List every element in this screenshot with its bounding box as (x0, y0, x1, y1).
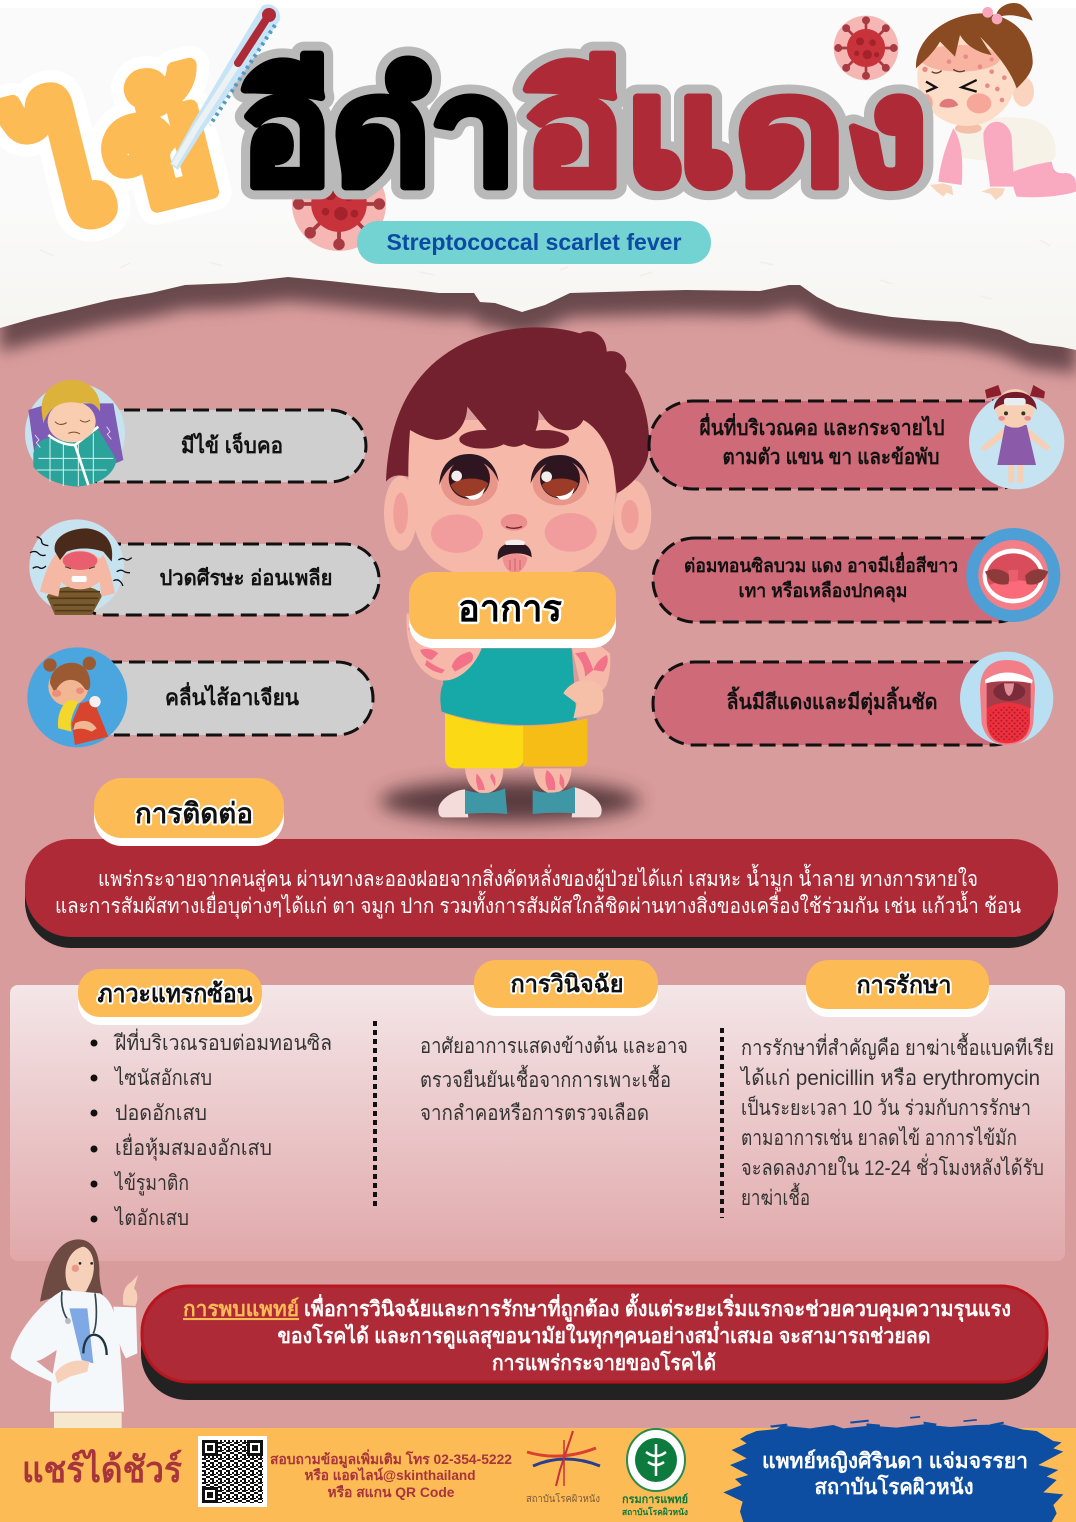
footer: contact text: หรือ สแกน QR Code (328, 1484, 455, 1500)
symptom pill: fever and sore throat (65, 410, 366, 482)
logo: institute of dermatology (526, 1431, 600, 1505)
symptom pill: swollen tonsils (653, 538, 1038, 622)
icon: boy with headache (29, 519, 132, 615)
icon: red tongue (960, 652, 1053, 745)
virus decoration, upper right (834, 16, 898, 80)
heading badge: complications (78, 969, 262, 1025)
footer: contact text: สอบถามข้อมูลเพิ่มเติม โทร 02-354-5222 (270, 1449, 512, 1468)
title: fever word: ไข้ (0, 54, 230, 267)
footer: contact text: หรือ แอดไลน์@skinthailand (304, 1466, 476, 1483)
footer: author brush banner: สถาบันโรคผิวหนัง (814, 1474, 974, 1499)
list: complications (90, 1028, 332, 1230)
logo: department of medical services: สถาบันโรคผิวหนัง (622, 1506, 688, 1517)
logo: institute of dermatology: สถาบันโรคผิวหนัง (526, 1492, 600, 1505)
virus decoration, under title (292, 157, 386, 251)
panel: complications, diagnosis, treatment (10, 985, 1065, 1261)
symptom pill: headache and fatigue (70, 544, 379, 615)
heading badge: treatment (806, 960, 989, 1017)
list: complications: ฝีที่บริเวณรอบต่อมทอนซิล (113, 1028, 332, 1055)
text: diagnosis: จากลำคอหรือการตรวจเลือด (420, 1102, 649, 1125)
footer: share slogan: แชร์ได้ชัวร์ (22, 1448, 183, 1490)
text: treatment: ได้แก่ penicillin หรือ erythromycin (739, 1066, 1040, 1090)
illustration: doctor (11, 1239, 138, 1430)
text: treatment (739, 1033, 1054, 1210)
text: treatment: เป็นระยะเวลา 10 วัน ร่วมกับการรักษา (741, 1094, 1031, 1120)
footer band (0, 1428, 1076, 1522)
title: black and red words (240, 48, 928, 216)
icon: girl vomiting (27, 647, 127, 747)
list: complications: เยื่อหุ้มสมองอักเสบ (115, 1133, 272, 1161)
illustration: sick boy (384, 327, 651, 817)
symptom pill: rash (649, 401, 1039, 489)
title: black and red words: อีดำ (240, 48, 516, 216)
title: fever word: ไข้ (0, 54, 230, 267)
list: complications: ไตอักเสบ (113, 1206, 189, 1230)
footer: author brush banner: แพทย์หญิงศิรินดา แจ่มจรรยา (762, 1449, 1028, 1474)
footer: contact text (270, 1449, 512, 1500)
text: treatment: ยาฆ่าเชื้อ (741, 1183, 810, 1210)
symptom pill: red tongue (653, 662, 1033, 745)
heading badge: transmission: การติดต่อ (135, 798, 253, 829)
icon: shadow under boy (380, 780, 640, 822)
footer: author brush banner (723, 1416, 1063, 1522)
symptom pill: rash: ผื่นที่บริเวณคอ และกระจายไป (700, 412, 944, 440)
symptom pill: swollen tonsils: ต่อมทอนซิลบวม แดง อาจมีเยื่อสีขาว (684, 552, 958, 577)
icon: crawling baby (916, 3, 1076, 200)
symptom pill: nausea and vomiting: คลื่นไส้อาเจียน (165, 681, 299, 710)
text: treatment: ตามอาการเช่น ยาลดไข้ อาการไข้มัก (741, 1126, 1017, 1150)
subtitle pill: Streptococcal scarlet fever (386, 229, 682, 255)
symptom pill: nausea and vomiting (70, 662, 373, 735)
logo: department of medical services (622, 1429, 688, 1517)
panel: see a doctor message: เพื่อการวินิจฉัยและการรักษาที่ถูกต้อง ตั้งแต่ระยะเริ่มแรกจะช่วยควบคุมความรุนแรง (304, 1293, 1011, 1323)
icon: open mouth with tonsils (966, 528, 1060, 622)
symptom pill: swollen tonsils: เทา หรือเหลืองปกคลุม (738, 580, 908, 603)
panel: transmission text: แพร่กระจายจากคนสู่คน ผ่านทางละอองฝอยจากสิ่งคัดหลั่งของผู้ป่วยได้แก่ เสมหะ น้ำมูก น้ำลาย ทางการหายใจ (98, 864, 978, 892)
title: black and red words: อีแดง (522, 48, 928, 216)
icon: boy in bed (25, 380, 125, 487)
symptom pill: headache and fatigue: ปวดศีรษะ อ่อนเพลีย (160, 566, 332, 590)
logo: department of medical services: กรมการแพทย์ (622, 1493, 688, 1506)
text: diagnosis: ตรวจยืนยันเชื้อจากการเพาะเชื้อ (420, 1065, 671, 1092)
heading badge: diagnosis (474, 960, 658, 1016)
heading badge: diagnosis: การวินิจฉัย (510, 971, 624, 998)
title: black and red words: อีดำ (240, 48, 516, 216)
list: complications: ไข้รูมาติก (113, 1171, 189, 1196)
list: complications: ปอดอักเสบ (115, 1102, 207, 1125)
list: complications: ไซนัสอักเสบ (113, 1066, 212, 1090)
symptom pill: rash: ตามตัว แขน ขา และข้อพับ (722, 445, 940, 469)
symptom pill: red tongue: ลิ้นมีสีแดงและมีตุ่มลิ้นชัด (726, 686, 938, 716)
text: diagnosis (420, 1035, 688, 1125)
title: black and red words: อีแดง (522, 48, 928, 216)
heading badge: treatment: การรักษา (856, 972, 952, 999)
footer: QR code (198, 1436, 267, 1507)
panel: see a doctor message (141, 1286, 1048, 1400)
icon: thermometer (170, 4, 280, 170)
panel: see a doctor message: การแพร่กระจายของโรคได้ (492, 1350, 716, 1375)
symptom pill: fever and sore throat: มีไข้ เจ็บคอ (181, 431, 283, 458)
heading badge: symptoms (409, 572, 616, 648)
panel: see a doctor message: ของโรคได้ และการดูแลสุขอนามัยในทุกๆคนอย่างสม่ำเสมอ จะสามารถช่วยลด (278, 1320, 930, 1350)
subtitle pill (357, 221, 711, 264)
heading badge: transmission (94, 778, 284, 846)
panel: transmission text (25, 839, 1058, 948)
icon: girl with rash (969, 385, 1064, 489)
heading badge: complications: ภาวะแทรกซ้อน (98, 980, 252, 1008)
torn paper header (0, 0, 1076, 374)
panel: see a doctor message: การพบแพทย์ (183, 1297, 299, 1321)
text: diagnosis: อาศัยอาการแสดงข้างต้น และอาจ (420, 1035, 688, 1058)
heading badge: symptoms: อาการ (458, 588, 562, 629)
